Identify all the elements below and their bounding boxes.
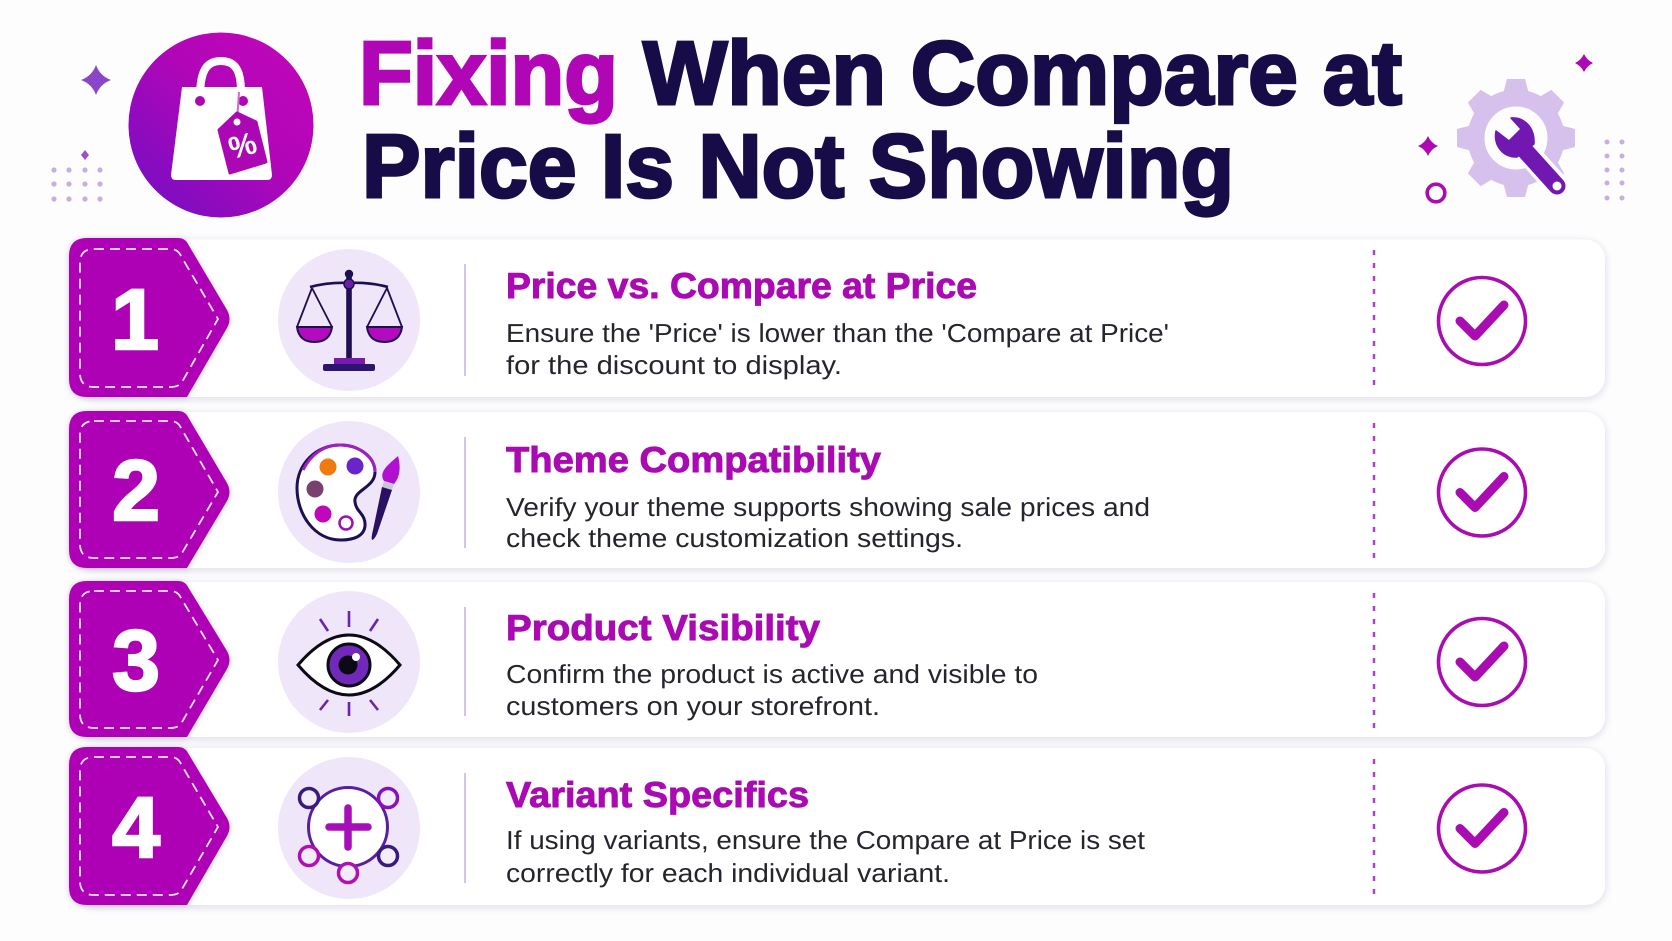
divider bbox=[464, 773, 466, 883]
description bbox=[506, 492, 1150, 553]
dashed separator bbox=[1373, 250, 1375, 388]
icon: paint palette and brush bbox=[278, 421, 420, 563]
dashed separator bbox=[1373, 593, 1375, 730]
panel: step 1 bbox=[69, 238, 1605, 397]
description: customers on your storefront. bbox=[506, 691, 880, 721]
number badge 2: 2 bbox=[112, 443, 160, 539]
card background bbox=[75, 240, 1605, 397]
card background bbox=[75, 748, 1605, 905]
card background bbox=[75, 582, 1605, 737]
panel: step 2 bbox=[69, 411, 1605, 568]
description: Confirm the product is active and visible to bbox=[506, 659, 1038, 689]
icon: variants with plus bbox=[278, 757, 420, 899]
icon: shopping bag with discount tag: % bbox=[225, 125, 260, 166]
icon: check mark bbox=[1438, 618, 1526, 706]
number badge 2 bbox=[69, 411, 230, 568]
description bbox=[506, 659, 1038, 721]
number badge 3: 3 bbox=[112, 613, 160, 709]
heading: Theme Compatibility bbox=[506, 439, 881, 480]
description: Ensure the 'Price' is lower than the 'Compare at Price' bbox=[506, 318, 1169, 348]
panel: step 4 bbox=[69, 747, 1605, 905]
divider bbox=[464, 607, 466, 716]
title: Price Is Not Showing bbox=[362, 117, 1234, 217]
dashed separator bbox=[1373, 423, 1375, 561]
heading: Price vs. Compare at Price bbox=[506, 265, 977, 306]
number badge 3 bbox=[69, 581, 230, 737]
left decorations: sparkle and dots bbox=[51, 65, 111, 202]
number badge 4: 4 bbox=[112, 780, 160, 876]
description: for the discount to display. bbox=[506, 350, 842, 380]
dashed separator bbox=[1373, 759, 1375, 896]
divider bbox=[464, 264, 466, 376]
icon: check mark bbox=[1438, 785, 1526, 872]
icon: check mark bbox=[1438, 449, 1526, 536]
icon: shopping bag with discount tag bbox=[128, 32, 314, 218]
number badge 1: 1 bbox=[111, 272, 159, 368]
description: check theme customization settings. bbox=[506, 523, 963, 553]
title: Fixing bbox=[359, 24, 618, 124]
icon: eye bbox=[278, 591, 420, 733]
icon: check mark bbox=[1438, 278, 1526, 364]
divider bbox=[464, 437, 466, 548]
number badge 4 bbox=[69, 747, 230, 905]
heading: Product Visibility bbox=[506, 607, 820, 648]
description bbox=[506, 318, 1169, 380]
description bbox=[506, 825, 1146, 888]
number badge 1 bbox=[69, 238, 230, 397]
card background bbox=[75, 412, 1605, 568]
description: Verify your theme supports showing sale prices and bbox=[506, 492, 1150, 522]
description: correctly for each individual variant. bbox=[506, 858, 950, 888]
description: If using variants, ensure the Compare at Price is set bbox=[506, 825, 1146, 855]
title bbox=[359, 24, 1402, 217]
panel: step 3 bbox=[69, 581, 1605, 737]
title: When Compare at bbox=[643, 24, 1402, 124]
icon: balance scales bbox=[278, 249, 420, 391]
heading: Variant Specifics bbox=[506, 774, 809, 815]
right decorations: sparkles, ring and dots bbox=[1418, 54, 1624, 202]
icon: gear with wrench bbox=[1457, 79, 1575, 197]
